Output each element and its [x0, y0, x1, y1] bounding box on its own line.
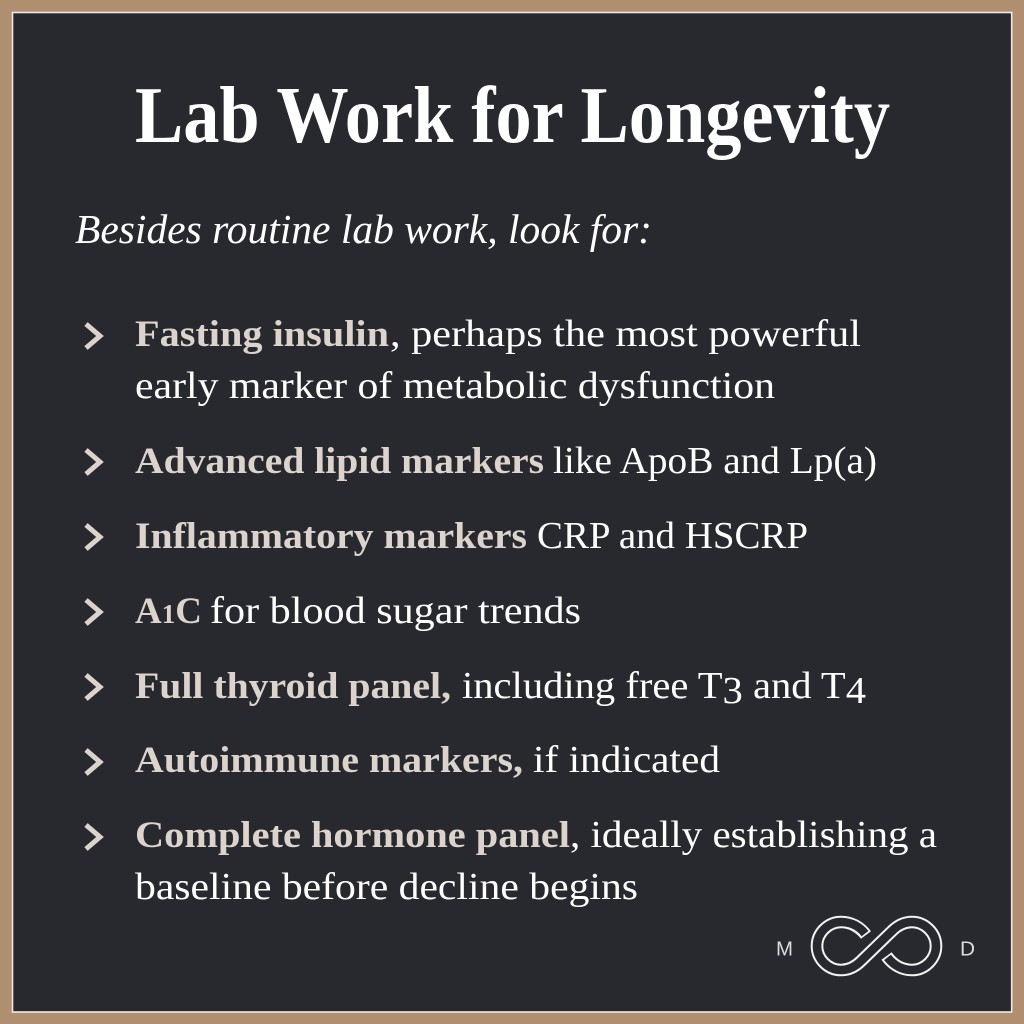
text: description line 1: , perhaps the most powerful: [390, 313, 861, 355]
list item: A1C: [86, 590, 581, 632]
text: description: like ApoB and Lp(a): [553, 440, 877, 482]
icon: chevron: [86, 324, 100, 348]
label: autoimmune markers: Autoimmune markers,: [135, 740, 523, 781]
label: full thyroid panel: Full thyroid panel,: [135, 666, 451, 707]
label: inflammatory markers: Inflammatory markers: [135, 516, 527, 557]
icon: chevron: [86, 675, 100, 699]
text: description line 2: baseline before decline begins: [135, 866, 638, 908]
text: description: CRP and HSCRP: [537, 515, 808, 557]
title: Lab Work for Longevity: [135, 70, 890, 160]
list item: inflammatory markers: [86, 515, 808, 557]
text: description: including free T: [462, 665, 706, 707]
text: description line 2: early marker of metabolic dysfunction: [135, 365, 775, 407]
text: description: if indicated: [533, 739, 720, 781]
label: A1C: A1C: [135, 591, 202, 632]
list item: fasting insulin: [86, 313, 861, 407]
icon: chevron: [86, 750, 100, 774]
logo: [776, 922, 975, 970]
logo letter D: D: [960, 938, 975, 960]
label: complete hormone panel: Complete hormone panel: [135, 815, 570, 856]
icon: chevron: [86, 450, 100, 474]
text: description: for blood sugar trends: [210, 590, 581, 632]
icon: chevron: [86, 525, 100, 549]
text: description line 1: , ideally establishing a: [570, 814, 937, 856]
label: fasting insulin: Fasting insulin: [135, 314, 389, 355]
list item: complete hormone panel: [86, 814, 937, 908]
icon: infinity symbol: [817, 922, 936, 970]
label: advanced lipid markers: Advanced lipid markers: [135, 441, 544, 482]
list item: advanced lipid markers: [86, 440, 877, 482]
list item: full thyroid panel: [86, 665, 866, 712]
logo letter M: M: [776, 938, 793, 960]
text: description: 4: [846, 670, 866, 712]
list item: autoimmune markers: [86, 739, 720, 781]
text: description: 3: [723, 670, 743, 712]
icon: chevron: [86, 825, 100, 849]
subtitle: Besides routine lab work, look for:: [75, 206, 652, 252]
text: description: and T: [743, 665, 846, 707]
icon: chevron: [86, 600, 100, 624]
